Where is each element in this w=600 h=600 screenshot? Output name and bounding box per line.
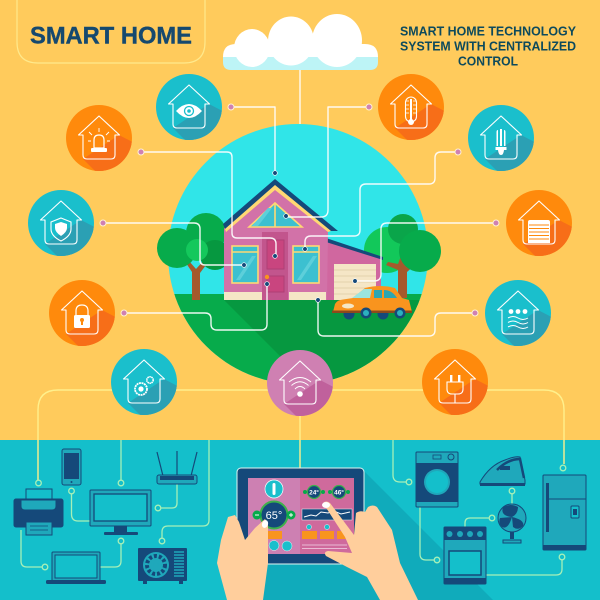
cloud [223,14,378,70]
icon: garage [506,190,572,256]
title: SMART HOME [30,22,192,50]
thermostat dial: 65° [266,510,282,522]
small teal buttons [269,524,330,551]
title frame [17,0,205,63]
washing machine [416,452,458,507]
iron [480,457,525,486]
printer [14,489,63,535]
garage door [334,264,376,300]
fan [498,504,526,543]
subtitle: CONTROL [458,54,518,68]
temperature readouts: 24° [309,488,319,496]
subtitle: SMART HOME TECHNOLOGY [400,24,577,38]
temperature readouts [303,486,350,498]
icon: wifi [267,350,333,416]
graph [302,509,352,520]
bottom panel [0,440,600,600]
smartphone [62,449,81,485]
icon: bulb [468,105,534,171]
icon: shield [28,190,94,256]
laptop [46,552,106,584]
temperature readouts: 46° [334,488,344,496]
icon: gears [111,349,177,415]
fridge [543,475,586,550]
right hand [322,502,418,600]
icon: thermometer [378,74,444,140]
white connector lines [103,70,496,336]
navy connector dots [242,171,357,302]
icon: plug [422,349,488,415]
monitor [90,490,151,535]
house [223,179,383,300]
right tree [364,214,441,298]
left tree [157,213,230,300]
main hub line [38,390,564,480]
car [332,286,412,320]
tablet long shadow [240,470,493,600]
icon: eye [156,74,222,140]
oven [444,527,486,584]
icon: lock [49,280,115,346]
subtitle [400,24,577,68]
icon: water [485,280,551,346]
pink connector dots [100,104,499,316]
device wire nodes [36,465,566,570]
left hand [217,515,269,600]
router [157,451,197,484]
tablet [237,468,364,564]
icon: alarm [66,105,132,171]
orange bars [266,531,350,539]
air conditioner [138,548,187,584]
subtitle: SYSTEM WITH CENTRALIZED [400,40,576,54]
device wires [21,440,562,575]
big circle scene [157,124,441,400]
